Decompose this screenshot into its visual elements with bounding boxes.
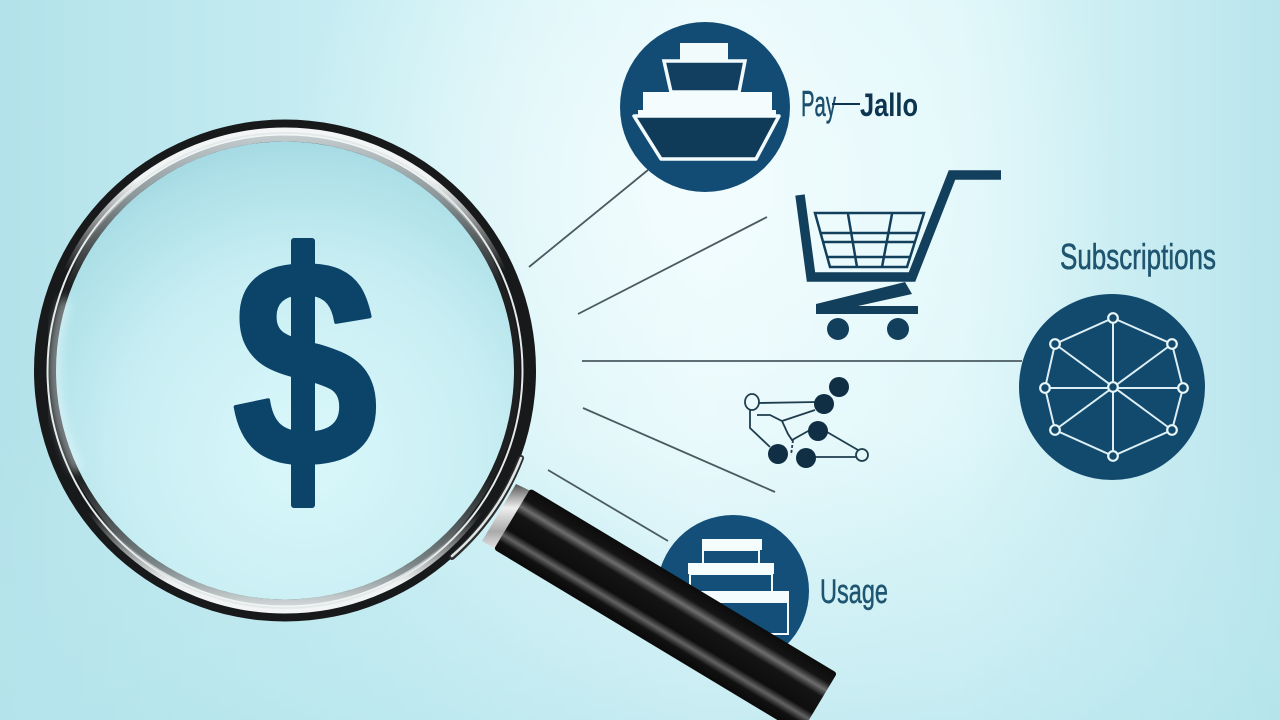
label: Pay [801,83,918,124]
icon: ship in circle [620,22,790,192]
magnifying glass handle [482,484,837,720]
icon: stacked boxes in circle [657,515,809,667]
label: Pay: Jallo [860,87,918,123]
icon: shopping cart [800,175,1001,340]
label: Usage: Usage [820,573,888,611]
lens collar [452,458,521,557]
connector lines [529,170,1022,541]
label: Subscriptions: Subscriptions [1060,236,1216,277]
icon: network in circle [1019,294,1205,480]
magnifying glass lens [34,120,536,622]
label: Pay: Pay [801,83,836,124]
icon: small node diagram [745,377,868,468]
dollar sign: $ [232,198,378,529]
